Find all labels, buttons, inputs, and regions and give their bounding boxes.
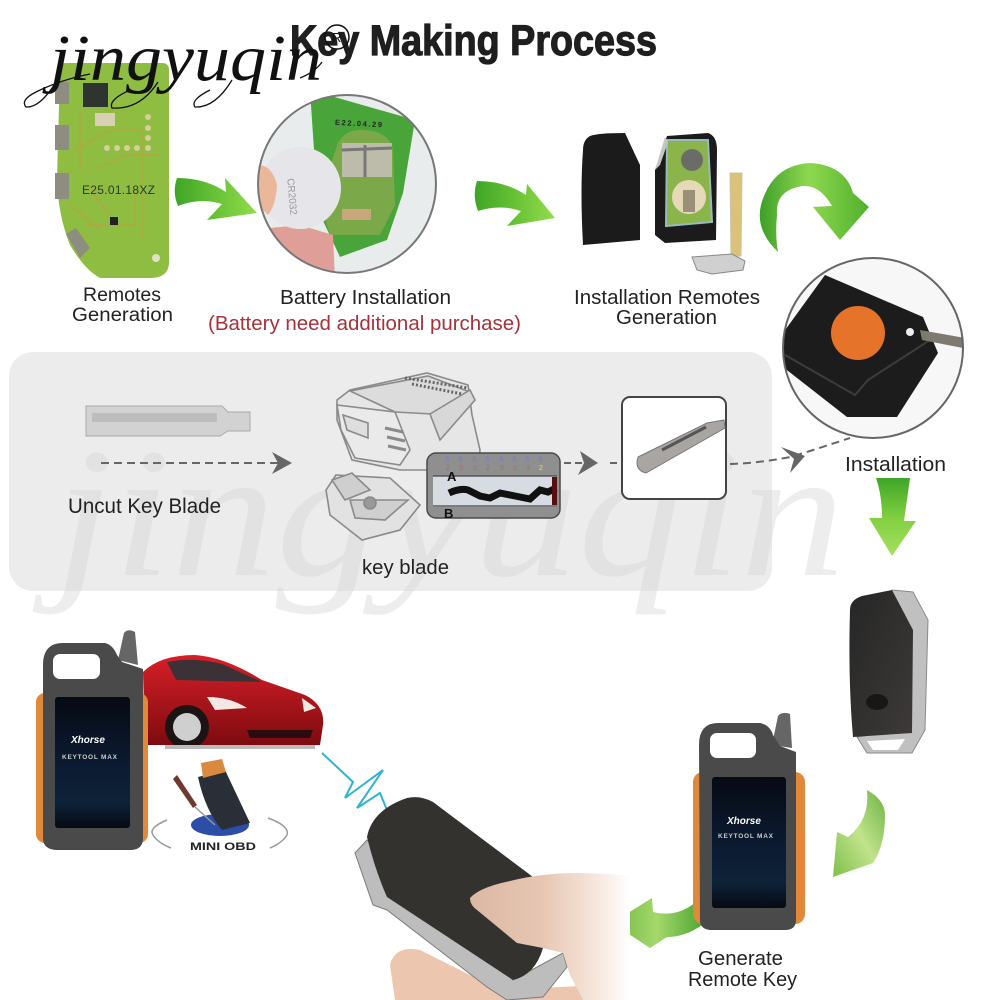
text: generate remote key: Generate [698, 948, 783, 970]
icon: assembled key fob [849, 590, 928, 753]
chart: key cut depth: 5 [513, 457, 517, 463]
chart: key cut depth: A [447, 469, 457, 484]
chart: key cut depth: 3 [459, 465, 463, 472]
chart: key cut depth: 5 [539, 457, 543, 463]
chart: key cut depth: 5 [446, 457, 450, 463]
text: key blade: key blade [362, 557, 449, 579]
chart: key cut depth: 2 [446, 465, 450, 472]
chart: key cut depth: B [444, 506, 453, 521]
chart: key cut depth: 5 [473, 457, 477, 463]
text: remotes generation [72, 285, 173, 326]
chart: key cut depth: 3 [500, 465, 504, 472]
panel: key blade cutting [9, 352, 845, 616]
arrow: green down [869, 478, 916, 556]
text: installation remotes generation: Generation [616, 307, 717, 329]
icon: battery installation circle [258, 90, 436, 280]
icon: handheld tool right [693, 713, 805, 930]
chart: key cut depth: 2 [539, 465, 543, 472]
icon: battery installation circle: CR2032 [284, 178, 298, 216]
text: battery note: (Battery need additional purchase) [208, 313, 521, 335]
watermark ghost text: jingyuqin [32, 411, 845, 616]
chart: key cut depth: 5 [459, 457, 463, 463]
text: installation remotes generation [574, 287, 760, 329]
chart: key cut depth: 1 [473, 465, 477, 472]
text: battery installation: Battery Installation [280, 287, 451, 309]
text: remotes generation: Remotes [83, 285, 161, 306]
text: installation remotes generation: Installation Remotes [574, 287, 760, 309]
arrow: green left [612, 895, 702, 948]
icon: key fob and hand [355, 797, 630, 1000]
title: Key Making Process [290, 17, 657, 65]
text: generate remote key: Remote Key [688, 969, 797, 991]
icon: disassembled remote [582, 133, 745, 274]
text: remotes generation: Generation [72, 305, 173, 326]
text: uncut key blade: Uncut Key Blade [68, 495, 221, 518]
chart: key cut depth: 5 [500, 457, 504, 463]
icon: uncut key blade [86, 406, 250, 436]
arrow: cut key to installation [730, 438, 850, 473]
arrow: green right 2 [475, 181, 555, 226]
chart: key cut depth: 1 [513, 465, 517, 472]
icon: cut key [622, 397, 726, 499]
icon: mini obd [152, 759, 287, 853]
icon: mini obd: MINI OBD [190, 841, 256, 853]
icon: registered mark: R [332, 30, 341, 45]
icon: red car [143, 655, 323, 749]
chart: key cut depth [427, 453, 560, 521]
arrow: blade to machine [101, 452, 292, 474]
arrow: green curved down [833, 790, 885, 877]
icon: green remote circuit board: E25.01.18XZ [82, 183, 155, 197]
icon: wireless signal [322, 753, 389, 815]
icon: handheld tool right: Xhorse [726, 816, 761, 827]
text: generate remote key [688, 948, 797, 991]
icon: green remote circuit board [55, 63, 169, 278]
icon: handheld tool left [36, 630, 148, 850]
icon: handheld tool right: KEYTOOL MAX [718, 833, 774, 840]
icon: installation circle [783, 258, 965, 438]
icon: registered mark [325, 25, 349, 49]
icon: handheld tool left: Xhorse [70, 735, 105, 746]
watermark brand: jingyuqin [41, 22, 322, 95]
chart: key cut depth: 5 [526, 457, 530, 463]
icon: key cutting machine [326, 373, 480, 540]
icon: handheld tool left: KEYTOOL MAX [62, 754, 118, 761]
chart: key cut depth: 5 [486, 457, 490, 463]
icon: battery installation circle: E22.04.29 [335, 118, 382, 129]
chart: key cut depth: 3 [526, 465, 530, 472]
arrow: green right 1 [175, 178, 257, 220]
arrow: machine to cut key [564, 451, 622, 475]
text: installation: Installation [845, 454, 946, 476]
arrow: green curved [760, 163, 869, 252]
chart: key cut depth: 2 [486, 465, 490, 472]
